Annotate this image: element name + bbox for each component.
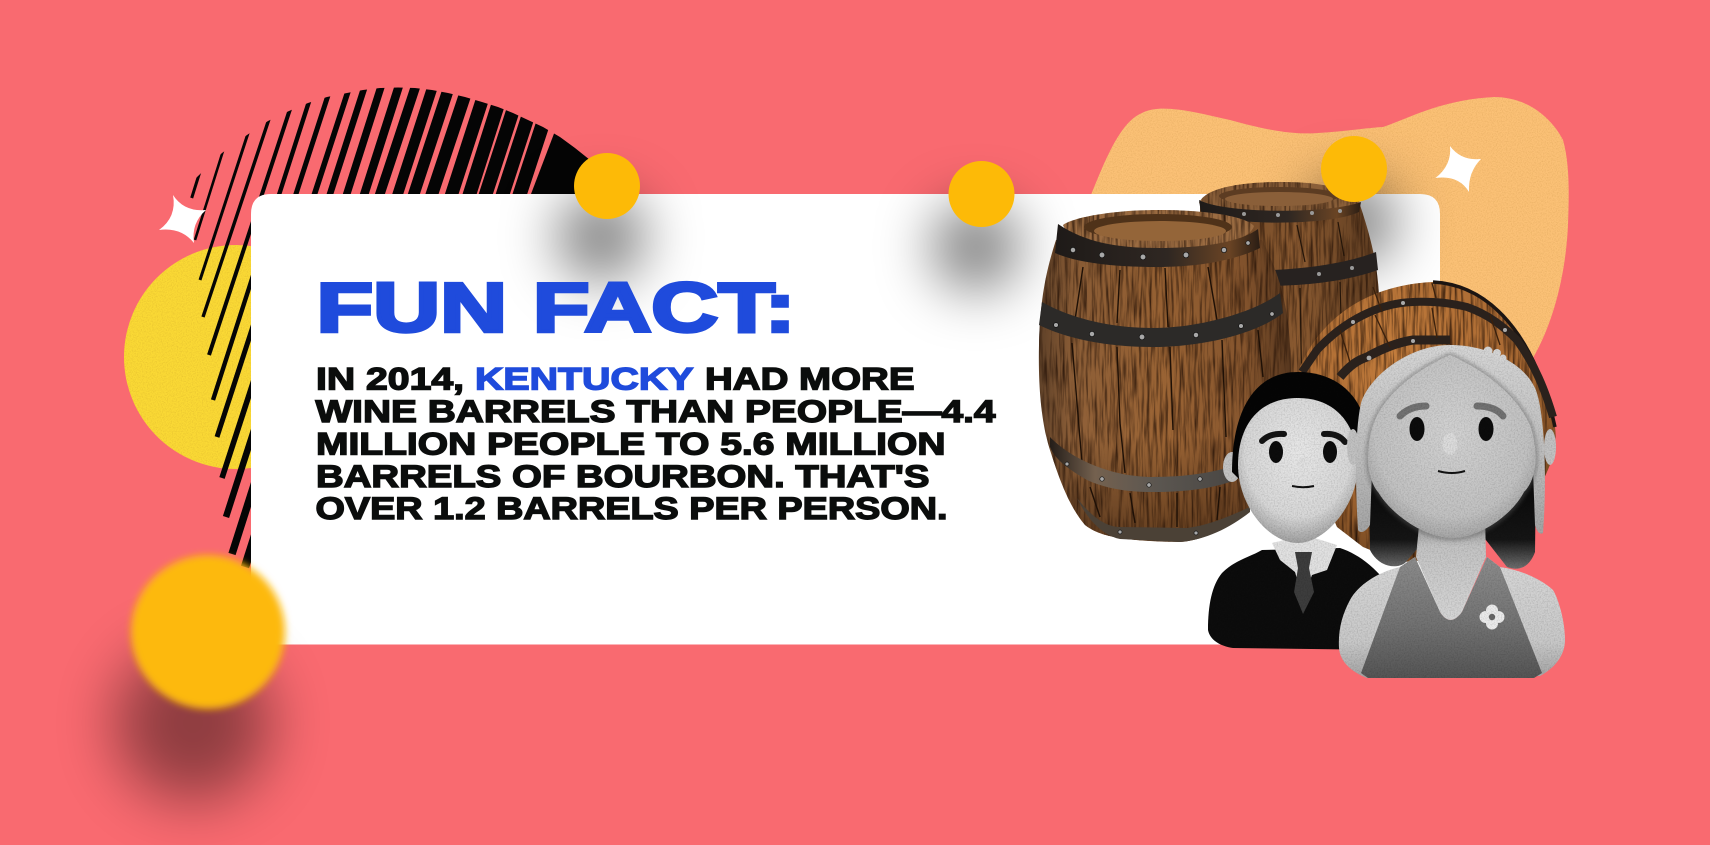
heading: FUN FACT:: [316, 268, 796, 346]
body text: HAD MORE: [705, 360, 914, 396]
shadows of yellow dots: [557, 178, 1396, 291]
man shirt and collar: [1272, 535, 1337, 600]
sparkle left: [159, 195, 206, 243]
woman eyebrows: [1400, 406, 1503, 416]
man eyebrows: [1262, 434, 1345, 442]
man hair: [1232, 372, 1362, 480]
man tie: [1294, 552, 1314, 614]
man nose: [1297, 456, 1309, 472]
person: woman: [1339, 345, 1565, 678]
man jacket: [1208, 548, 1390, 650]
decorative orange blob: [1089, 97, 1569, 420]
body text: KENTUCKY: [475, 360, 694, 396]
woman light hair: [1356, 345, 1545, 534]
sparkle right: [1436, 146, 1481, 192]
woman hair clip: [1484, 346, 1506, 362]
man ear: [1223, 452, 1241, 482]
body text: IN 2014,: [316, 360, 464, 396]
barrel: front: [1039, 210, 1291, 542]
yellow dots: [574, 136, 1387, 227]
body text: [316, 360, 996, 526]
woman mouth: [1438, 471, 1465, 473]
man head: [1238, 398, 1358, 543]
man eyes: [1269, 441, 1337, 463]
woman bust: [1339, 557, 1565, 678]
barrel: side: [1290, 282, 1556, 562]
striped black blob: [190, 88, 588, 568]
decorative yellow circle: [124, 245, 348, 469]
big circle shadow: [115, 645, 271, 801]
body text: OVER 1.2 BARRELS PER PERSON.: [316, 490, 948, 526]
woman face: [1368, 355, 1536, 538]
woman ears: [1347, 429, 1556, 465]
big blurred yellow circle: [131, 555, 285, 709]
person: man: [1208, 372, 1390, 650]
man mouth: [1292, 486, 1314, 487]
woman neck: [1416, 515, 1486, 620]
body text: WINE BARRELS THAN PEOPLE—4.4: [316, 393, 996, 429]
white card: [251, 194, 1440, 644]
woman eyes: [1410, 417, 1494, 441]
woman flower: [1480, 604, 1504, 630]
woman face shadow: [1368, 355, 1536, 538]
woman nose: [1442, 433, 1458, 455]
body text: BARRELS OF BOURBON. THAT'S: [316, 458, 930, 494]
woman dark hair: [1368, 465, 1536, 569]
barrel: back: [1199, 182, 1379, 440]
body text: MILLION PEOPLE TO 5.6 MILLION: [316, 426, 946, 462]
woman dress: [1361, 557, 1542, 678]
